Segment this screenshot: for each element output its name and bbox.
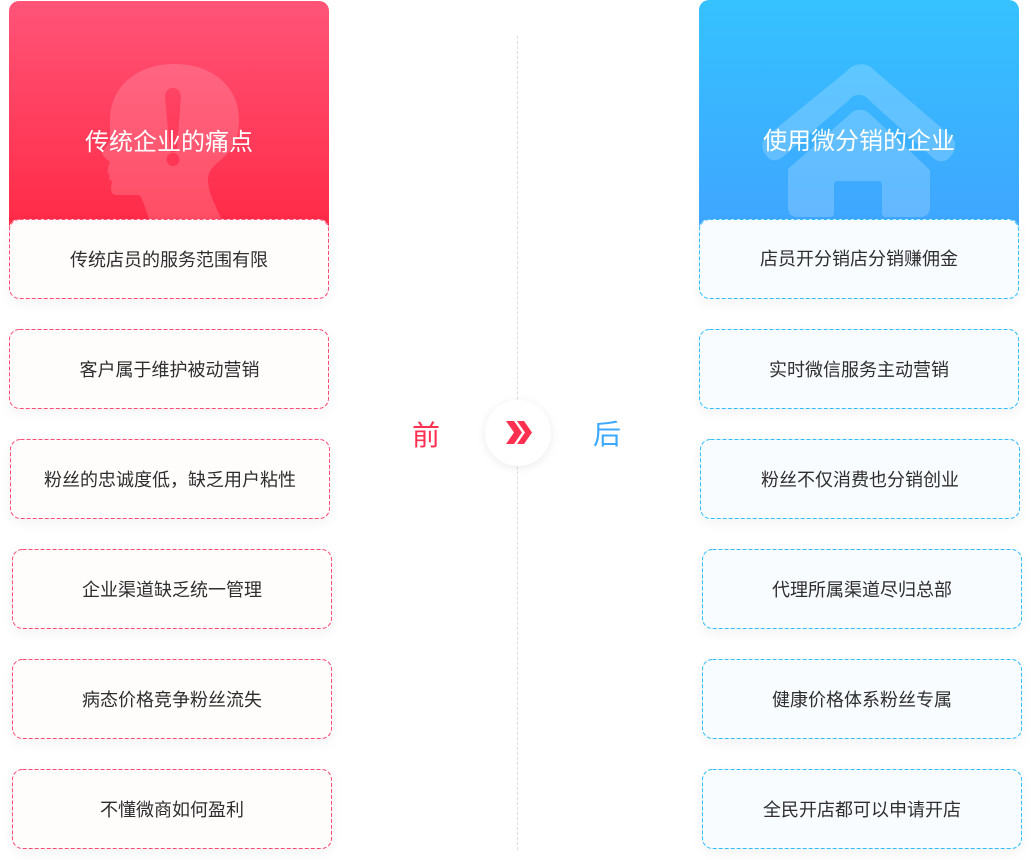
left card 2 [9, 329, 329, 409]
left card 4 [12, 549, 332, 629]
right card 6: 全民开店都可以申请开店 [763, 800, 961, 820]
right card 5: 健康价格体系粉丝专属 [772, 690, 952, 710]
right card 1 [699, 219, 1019, 299]
right card 4 [702, 549, 1022, 629]
left card 5 [12, 659, 332, 739]
left card 3 [10, 439, 330, 519]
left card 2: 客户属于维护被动营销 [80, 360, 260, 380]
heading: traditional enterprise pain points: 传统企业的痛点 [85, 129, 253, 156]
right card 2: 实时微信服务主动营销 [769, 360, 949, 380]
left card 4: 企业渠道缺乏统一管理 [82, 580, 262, 600]
right card 6 [702, 769, 1022, 849]
heading: enterprises using micro-distribution: 使用微分销的企业 [763, 128, 955, 155]
icon: round button with double chevron arrow [485, 400, 551, 466]
right card 3 [700, 439, 1020, 519]
right card 3: 粉丝不仅消费也分销创业 [761, 470, 959, 490]
icon: head with exclamation mark [102, 64, 239, 219]
left card 3: 粉丝的忠诚度低，缺乏用户粘性 [44, 470, 296, 490]
left card 1 [9, 219, 329, 299]
label: after: 后 [593, 419, 621, 450]
right card 5 [702, 659, 1022, 739]
right card 1: 店员开分销店分销赚佣金 [760, 249, 958, 269]
left card 5: 病态价格竞争粉丝流失 [82, 690, 262, 710]
left card 1: 传统店员的服务范围有限 [70, 250, 268, 270]
right card 4: 代理所属渠道尽归总部 [772, 580, 952, 600]
label: before: 前 [412, 420, 440, 451]
panel: traditional enterprise header [9, 1, 329, 229]
panel: enterprise using micro-distribution header [699, 0, 1019, 228]
right card 2 [699, 329, 1019, 409]
center divider line [517, 36, 518, 850]
left card 6 [12, 769, 332, 849]
left card 6: 不懂微商如何盈利 [100, 800, 244, 820]
icon: house [762, 64, 956, 217]
